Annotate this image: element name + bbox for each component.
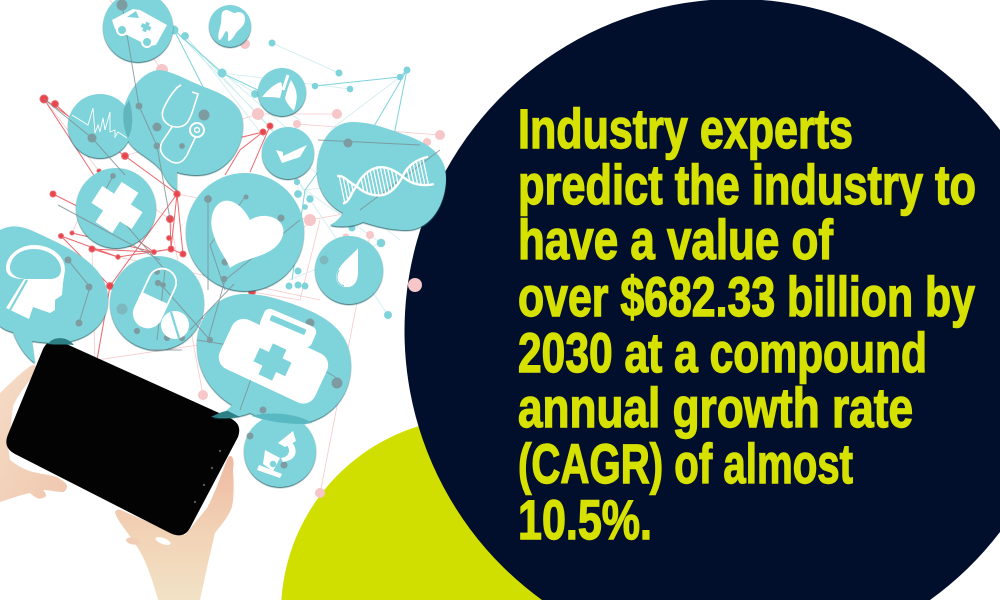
- icon: stethoscope: [160, 85, 204, 163]
- bubble: cross: [76, 168, 156, 248]
- icon: pill capsule: [129, 264, 181, 332]
- icon: tooth: [218, 10, 245, 41]
- bubble: ambulance: [103, 0, 173, 62]
- hands holding tablet: [0, 365, 234, 600]
- bubble: tooth: [209, 5, 251, 47]
- grey network over bubbles: [44, 0, 440, 468]
- main text: (CAGR) of almost: [518, 432, 853, 495]
- little finger: [125, 536, 141, 546]
- bubble: heart: [186, 173, 304, 291]
- icon: DNA helix: [337, 157, 434, 203]
- icon: check: [276, 145, 307, 163]
- pale network lines: [44, 0, 440, 494]
- tablet buttons: [194, 450, 221, 503]
- icon: first aid kit: [214, 307, 332, 408]
- teal network: [170, 26, 410, 318]
- icon: ambulance: [112, 9, 167, 47]
- main text: [518, 97, 976, 551]
- bubble: pill: [110, 256, 204, 350]
- icon: cross: [84, 174, 150, 241]
- bubble: microscope: [244, 415, 316, 487]
- main text: 10.5%.: [518, 488, 652, 551]
- icon: drop: [336, 248, 358, 287]
- icon: heart: [211, 201, 283, 268]
- navy circle: [405, 0, 1000, 600]
- main text: have a value of: [518, 208, 833, 271]
- bubble: first aid: [197, 294, 351, 424]
- left hand: [0, 365, 67, 502]
- icon: brain and head: [6, 245, 65, 319]
- gap between fingers: [154, 535, 172, 547]
- icon: round pill: [161, 311, 189, 339]
- right hand: [115, 456, 234, 600]
- bubble: stethoscope: [122, 70, 243, 190]
- pink nodes: [156, 39, 445, 498]
- icon: lungs: [262, 75, 297, 111]
- bubble: brain: [0, 226, 108, 363]
- bubble: lungs: [258, 68, 306, 116]
- bubble: drop: [315, 236, 383, 304]
- bubble: EKG: [68, 94, 132, 158]
- lime circle: [281, 417, 671, 600]
- icon: EKG line: [72, 108, 127, 138]
- tablet: [6, 340, 239, 535]
- white icons: [6, 9, 434, 478]
- bubble overlaps on tablet and neighbours: [48, 100, 312, 424]
- main text: Industry experts: [518, 97, 853, 160]
- bubbles: [0, 0, 446, 487]
- icon: microscope: [257, 431, 296, 478]
- red network: [40, 95, 273, 360]
- bubble: check: [262, 127, 314, 179]
- bubble: DNA: [317, 122, 446, 230]
